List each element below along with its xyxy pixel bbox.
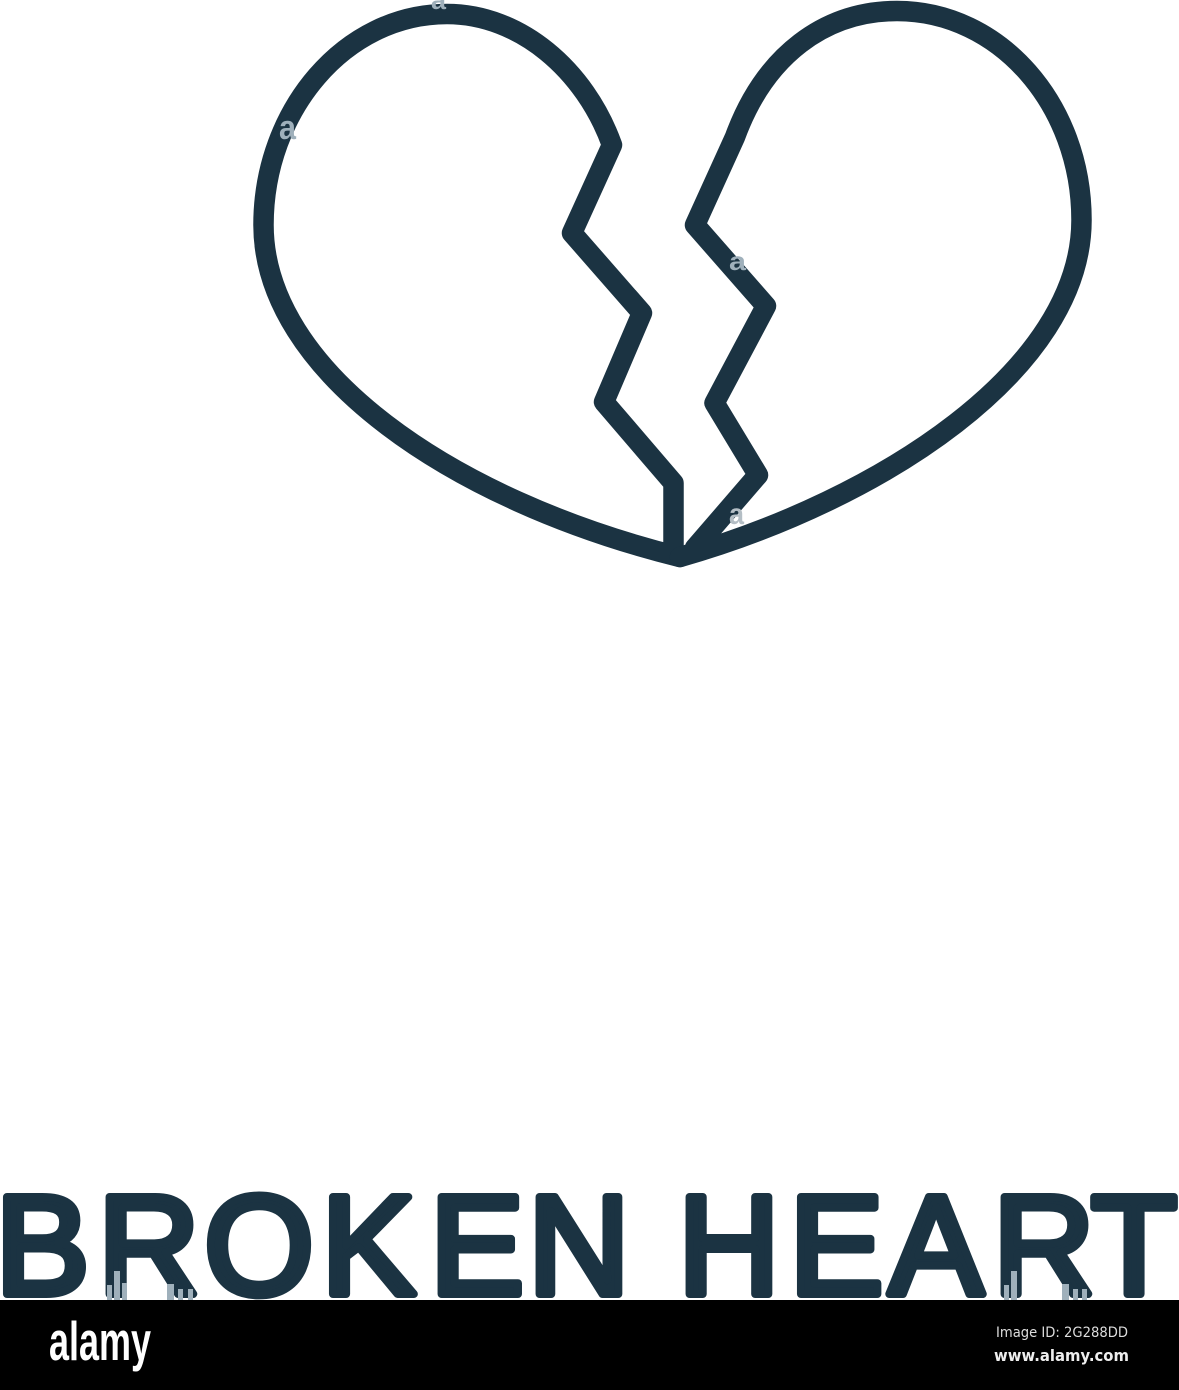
watermark fragments over heart: a (729, 246, 747, 276)
footer bar (0, 1300, 1179, 1390)
watermark fragments over heart: a (279, 109, 297, 147)
footer image id: Image ID: 2G288DD (996, 1325, 1128, 1341)
footer url: www.alamy.com (994, 1346, 1129, 1365)
watermark fragments over heart (279, 0, 747, 531)
title: BROKEN HEART (0, 1166, 1177, 1324)
icon: broken heart (264, 11, 1082, 557)
watermark fragments on title (107, 1271, 1087, 1300)
footer logo: alamy (49, 1310, 151, 1372)
watermark fragments over heart: a (729, 498, 744, 531)
icon: left heart half (264, 14, 680, 557)
icon: right heart half (680, 11, 1082, 557)
